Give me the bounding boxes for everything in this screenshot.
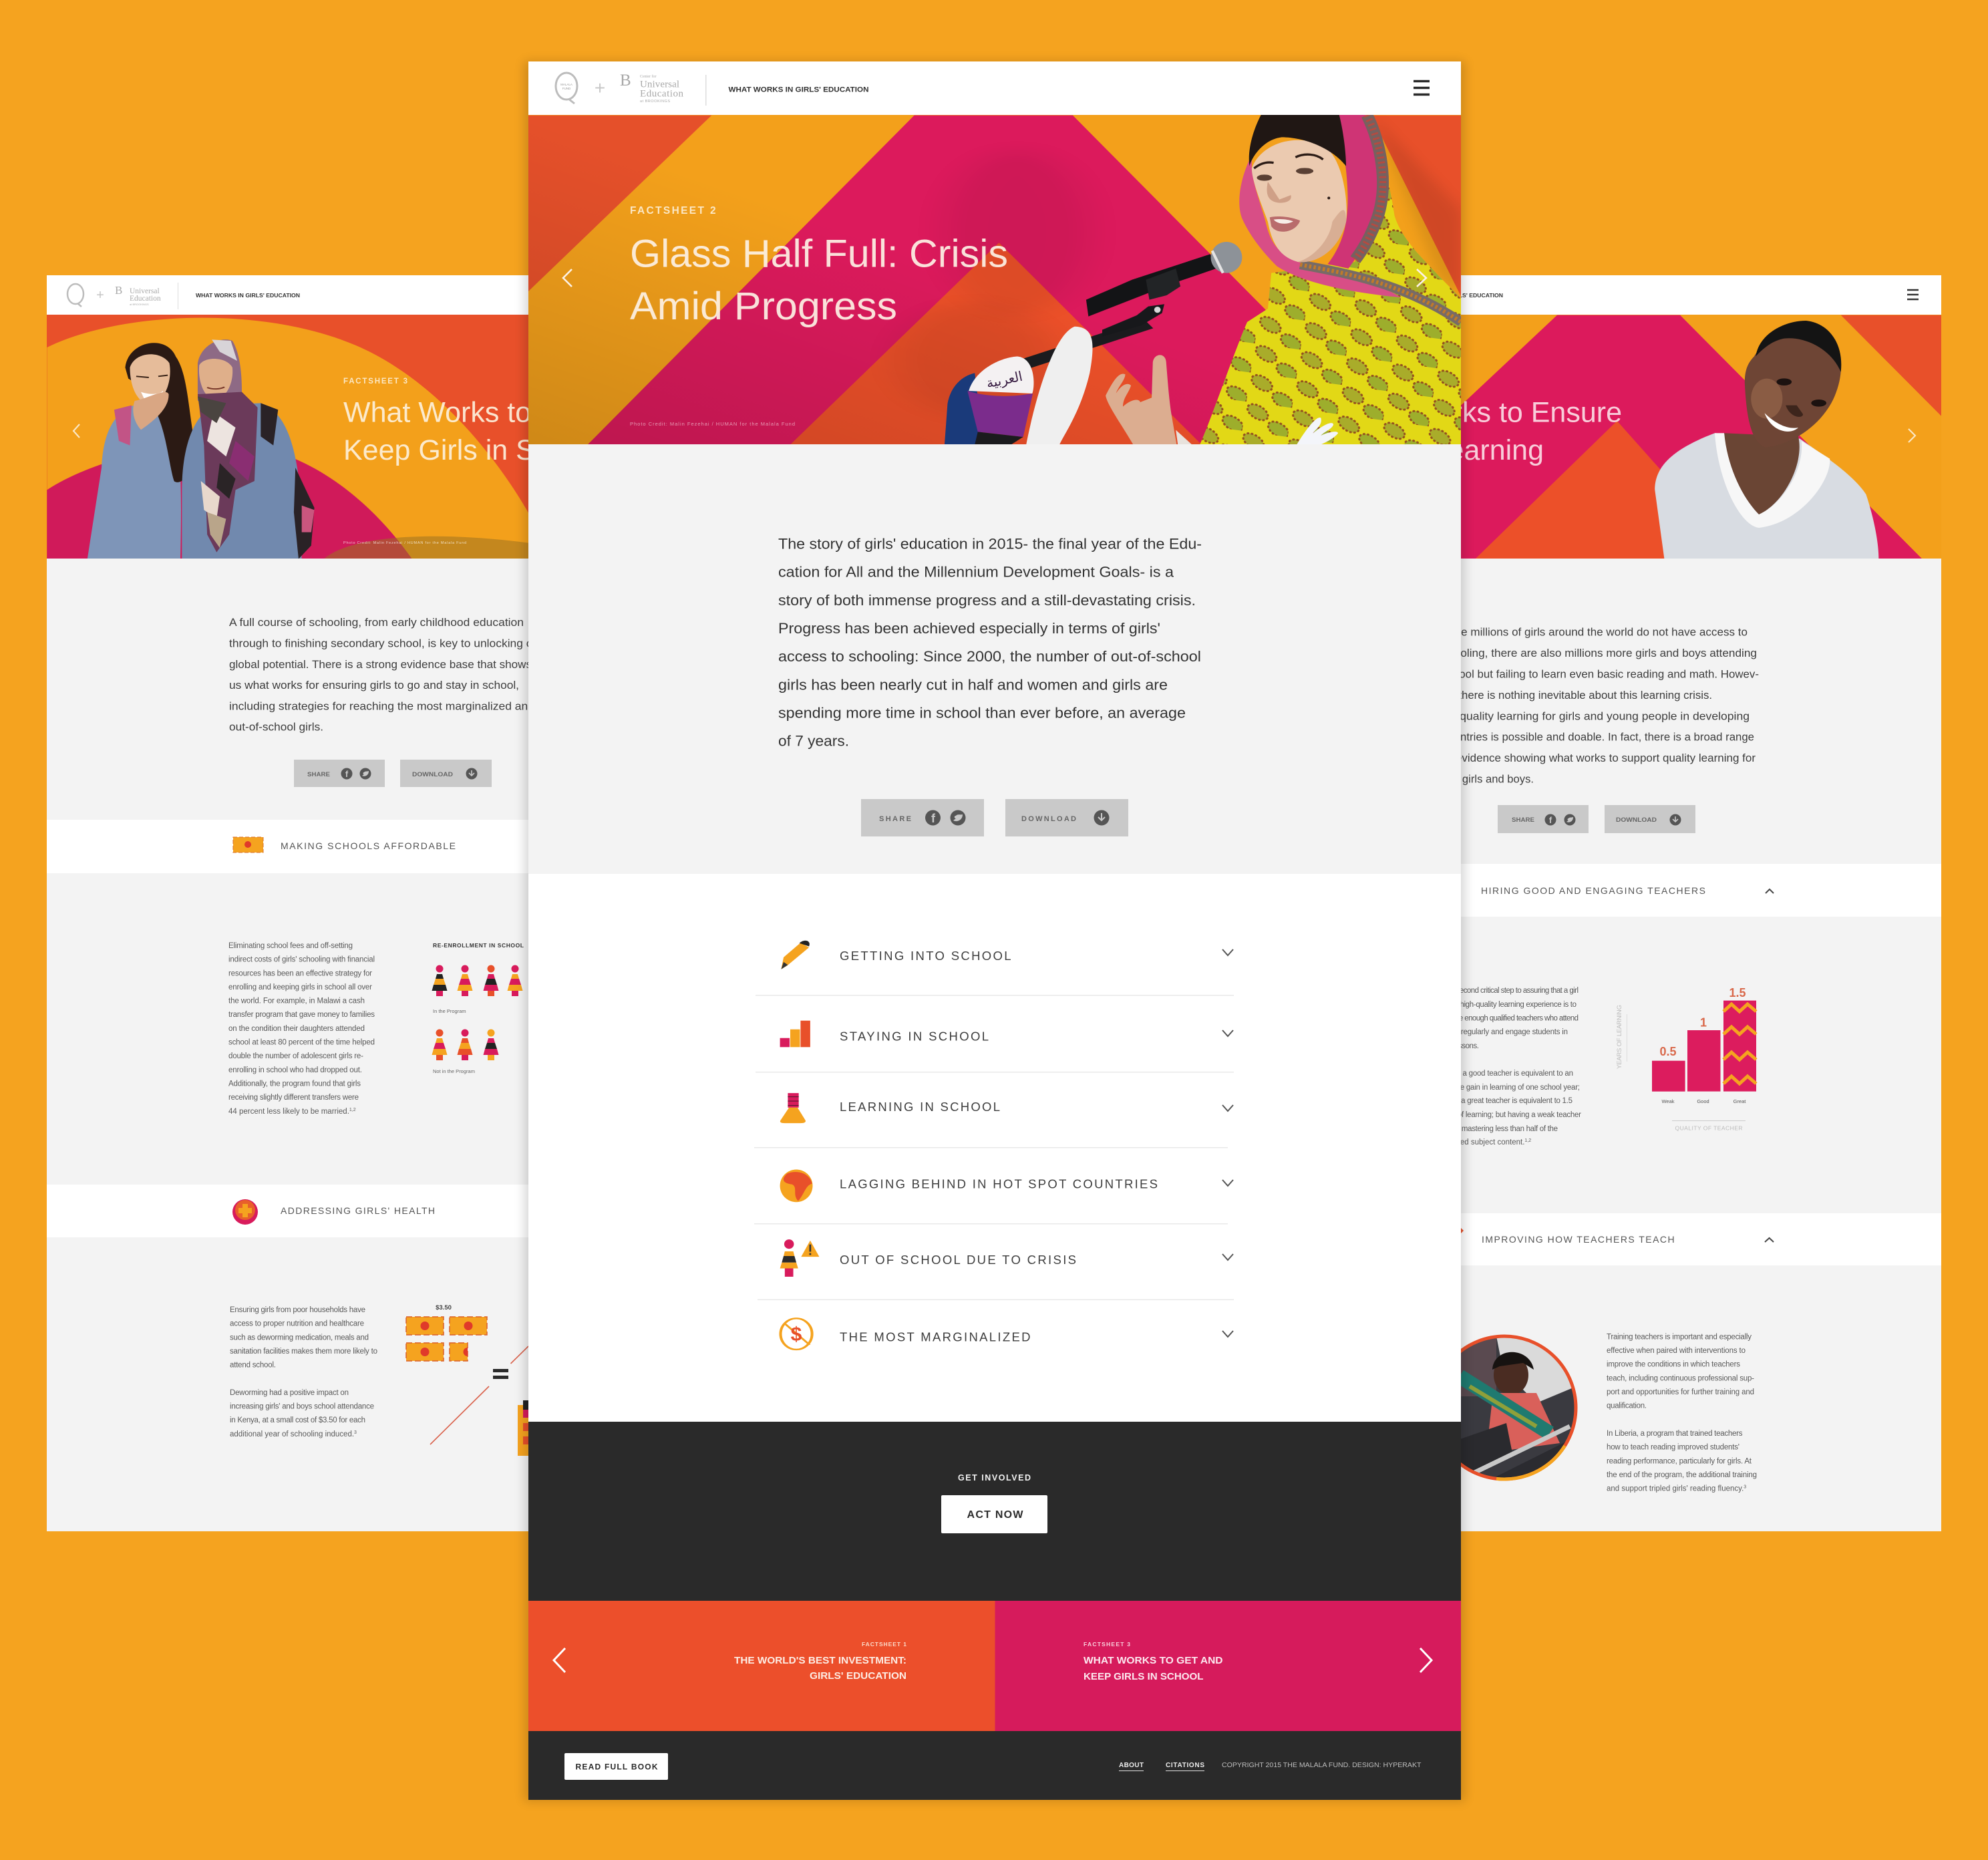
speaker illustration <box>1086 115 1462 447</box>
item: learning in school: LEARNING IN SCHOOL <box>840 1100 1000 1114</box>
section bar: making schools affordable: MAKING SCHOOLS AFFORDABLE <box>281 840 456 851</box>
item: learning in school <box>754 1100 1233 1148</box>
icons drawn in list space <box>780 941 819 1350</box>
text: eliminating school fees: receiving slightly different transfers were <box>228 1094 359 1102</box>
left intro text: A full course of schooling, from early childhood education <box>229 616 524 629</box>
copyright: COPYRIGHT 2015 THE MALALA FUND. DESIGN: HYPERAKT <box>1222 1762 1422 1769</box>
left hero title: What Works to Get and <box>343 397 641 429</box>
text: eliminating school fees: Eliminating school fees and off-setting <box>228 942 353 950</box>
right share button: f <box>1549 815 1552 825</box>
photo: teachers in classroom circle <box>1430 1333 1580 1490</box>
text: teachers matter: means mastering less than half of the <box>1438 1125 1558 1133</box>
right hero title: Quality Learning <box>1335 434 1544 466</box>
logo: Malala Fund: MALALA <box>560 83 572 86</box>
bar chart: years of learning by quality of teacher: YEARS OF LEARNING <box>1616 1005 1623 1069</box>
text: training teachers: Training teachers is important and especially <box>1607 1333 1752 1341</box>
icon: rising bars <box>780 1021 810 1047</box>
right girl <box>182 339 315 559</box>
logo: Center for Universal Education at Brookings: B <box>620 71 631 90</box>
bar chart: years of learning by quality of teacher: 1.5 <box>1729 986 1746 999</box>
left header bar: at BROOKINGS <box>130 303 149 306</box>
pictogram: re-enrollment in school: In the Program <box>433 1008 466 1014</box>
text: ensuring girls health: sanitation facilities makes them more likely to <box>230 1348 377 1356</box>
right hero title <box>1335 397 1622 466</box>
section bar: improving how teachers teach: IMPROVING HOW TEACHERS TEACH <box>1482 1234 1675 1245</box>
text: teachers matter <box>1438 987 1581 1146</box>
pictogram: re-enrollment in school: Not in the Program <box>433 1068 475 1074</box>
text: eliminating school fees: indirect costs of girls' schooling with financial <box>228 956 375 964</box>
icon: menu <box>1414 82 1430 95</box>
text: training teachers: improve the conditions in which teachers <box>1607 1361 1740 1369</box>
left hero title: Keep Girls in School <box>343 434 604 466</box>
intro text: girls has been nearly cut in half and women and girls are <box>778 676 1168 693</box>
right hero arrow <box>1909 429 1915 442</box>
section bar: improving how teachers teach <box>1461 1213 1941 1265</box>
logo: Center for Universal Education at Brookings: at BROOKINGS <box>640 100 670 104</box>
left header bar <box>47 275 528 315</box>
intro text: spending more time in school than ever before, an average <box>778 704 1186 721</box>
left download button <box>400 760 492 787</box>
text: training teachers: and support tripled girls' reading fluency. <box>1607 1485 1744 1493</box>
left hero arrow <box>73 424 79 438</box>
hero arrow right <box>1417 269 1426 287</box>
text: eliminating school fees: school at least 80 percent of the time helped <box>228 1039 375 1047</box>
logo: Malala Fund <box>556 73 577 104</box>
text: eliminating school fees <box>228 942 375 1116</box>
text: training teachers: port and opportunities for further training and <box>1607 1388 1754 1396</box>
hero title: Glass Half Full: Crisis <box>630 232 1008 275</box>
right intro text: school but failing to learn even basic reading and math. Howev- <box>1442 668 1759 680</box>
text: ensuring girls health: access to proper nutrition and healthcare <box>230 1320 364 1328</box>
left header bar: Education <box>130 295 161 303</box>
right hero with smiling young woman <box>1335 315 1942 559</box>
section bar: making schools affordable <box>47 820 528 873</box>
button: act now: ACT NOW <box>967 1509 1023 1521</box>
left intro text: through to finishing secondary school, is key to unlocking our <box>229 637 543 649</box>
next factsheet link <box>995 1601 1461 1731</box>
panel: factsheet 3 left page <box>47 275 528 1531</box>
left intro text: out-of-school girls. <box>229 721 323 734</box>
next factsheet link: WHAT WORKS TO GET AND <box>1084 1655 1223 1666</box>
icon: banknote <box>233 837 263 852</box>
text: training teachers: 3 <box>1744 1485 1746 1490</box>
share button: SHARE <box>879 815 911 823</box>
logo: Center for Universal Education at Brookings: Education <box>640 88 684 99</box>
item: lagging behind in hot spot countries <box>754 1177 1233 1224</box>
intro text: story of both immense progress and a still-devastating crisis. <box>778 592 1196 609</box>
microphone label: العربية <box>985 368 1024 392</box>
panel shadow <box>524 61 1465 1801</box>
right intro text <box>1436 626 1759 786</box>
text: teachers matter: has a high-quality learning experience is to <box>1440 1001 1577 1009</box>
microphones <box>945 319 1153 445</box>
main hero with speaker at microphones <box>521 115 1465 447</box>
icon: health cross <box>232 1199 258 1225</box>
icon: facebook <box>925 810 941 826</box>
panel: factsheet 4 right page <box>1335 275 1942 1531</box>
item: out of school due to crisis: OUT OF SCHOOL DUE TO CRISIS <box>840 1253 1076 1267</box>
item: getting into school <box>756 949 1234 995</box>
download button: DOWNLOAD <box>1021 815 1076 823</box>
previous factsheet link: GIRLS' EDUCATION <box>810 1670 906 1682</box>
left intro text: global potential. There is a strong evidence base that shows <box>229 658 532 671</box>
item: staying in school: STAYING IN SCHOOL <box>840 1029 989 1044</box>
intro text: cation for All and the Millennium Development Goals- is a <box>778 564 1174 581</box>
hero photo credit: Photo Credit: Malin Fezehai / HUMAN for the Malala Fund <box>630 421 795 427</box>
left hero credit: Photo Credit: Malin Fezehai / HUMAN for the Malala Fund <box>343 541 466 545</box>
text: ensuring girls health: additional year of schooling induced. <box>230 1430 354 1438</box>
left header bar: + <box>96 288 104 303</box>
previous factsheet link: FACTSHEET 1 <box>862 1641 906 1648</box>
left share button: SHARE <box>307 771 330 778</box>
text: ensuring girls health: increasing girls' and boys school attendance <box>230 1403 374 1411</box>
button: act now <box>941 1495 1047 1533</box>
panel: factsheet 2 main page <box>521 61 1465 1800</box>
item: out of school due to crisis <box>758 1253 1234 1300</box>
text: eliminating school fees: double the number of adolescent girls re- <box>228 1052 363 1060</box>
section bar: hiring good and engaging teachers: HIRING GOOD AND ENGAGING TEACHERS <box>1481 885 1705 896</box>
icon: girl and warning sign <box>780 1239 819 1277</box>
text: eliminating school fees: enrolling in school who had dropped out. <box>228 1066 362 1074</box>
button: read full book <box>564 1753 668 1780</box>
section bar: hiring good and engaging teachers <box>1461 864 1941 917</box>
text: teachers matter: The second critical step to assuring that a girl <box>1442 987 1579 995</box>
right intro text: both girls and boys. <box>1438 772 1534 786</box>
accordion list <box>528 874 1461 1422</box>
hero arrow left <box>563 269 572 287</box>
next factsheet link: FACTSHEET 3 <box>1084 1641 1130 1648</box>
next factsheet link: KEEP GIRLS IN SCHOOL <box>1084 1671 1204 1682</box>
left header bar: WHAT WORKS IN GIRLS' EDUCATION <box>196 293 300 299</box>
text: teachers matter: Having a good teacher is equivalent to an <box>1438 1070 1573 1078</box>
text: ensuring girls health: attend school. <box>230 1362 276 1370</box>
item: the most marginalized <box>840 1330 1233 1344</box>
footer <box>528 1731 1461 1800</box>
text: ensuring girls health: 3 <box>354 1430 357 1435</box>
icon: facebook: f <box>931 812 936 825</box>
bar chart: years of learning by quality of teacher: QUALITY OF TEACHER <box>1675 1125 1742 1132</box>
left intro text: including strategies for reaching the most marginalized and <box>229 700 534 712</box>
button: read full book: READ FULL BOOK <box>576 1762 658 1771</box>
hero eyebrow: FACTSHEET 2 <box>630 205 716 216</box>
left hero eyebrow: FACTSHEET 3 <box>343 377 407 385</box>
pictogram: re-enrollment in school: RE-ENROLLMENT IN SCHOOL <box>433 942 524 949</box>
bar chart: years of learning by quality of teacher: Great <box>1733 1098 1746 1104</box>
section bar: addressing girls' health <box>47 1185 528 1237</box>
footer link: about: ABOUT <box>1119 1762 1144 1769</box>
text: training teachers: reading performance, particularly for girls. At <box>1607 1457 1752 1465</box>
text: teachers matter: 1,2 <box>1524 1138 1531 1143</box>
text: teachers matter: having a great teacher is equivalent to 1.5 <box>1438 1097 1572 1105</box>
hero title <box>630 232 1008 328</box>
right hero title: What Works to Ensure <box>1335 397 1622 429</box>
right intro text: of evidence showing what works to support quality learning for <box>1443 752 1756 764</box>
text: teachers matter: expected subject content. <box>1438 1138 1524 1146</box>
intro text: access to schooling: Since 2000, the number of out-of-school <box>778 648 1201 665</box>
icon: flask <box>780 1093 806 1123</box>
left share button: f <box>345 769 349 779</box>
icon: download <box>1094 810 1109 826</box>
text: training teachers: teach, including continuous professional sup- <box>1607 1374 1754 1382</box>
right header bar <box>1399 275 1941 315</box>
logo: Center for Universal Education at Brookings: Universal <box>640 79 679 90</box>
text: teachers matter: ensure enough qualified teachers who attend <box>1442 1014 1579 1022</box>
item: getting into school: GETTING INTO SCHOOL <box>840 949 1011 963</box>
right share button: SHARE <box>1512 816 1534 823</box>
bar chart: years of learning by quality of teacher: Good <box>1697 1098 1709 1104</box>
logo: Center for Universal Education at Brookings: Center for <box>640 74 656 79</box>
bar chart: years of learning by quality of teacher: 0.5 <box>1659 1045 1677 1058</box>
text: ensuring girls health: in Kenya, at a small cost of $3.50 for each <box>230 1416 365 1424</box>
left hero title <box>343 401 528 466</box>
section bar: addressing girls' health: ADDRESSING GIRLS' HEALTH <box>281 1205 435 1216</box>
bar chart: years of learning by quality of teacher <box>1616 986 1756 1132</box>
text: eliminating school fees: enrolling and keeping girls in school all over <box>228 983 372 991</box>
text: ensuring girls health <box>230 1306 377 1438</box>
left download button: DOWNLOAD <box>412 771 454 778</box>
text: training teachers: In Liberia, a program that trained teachers <box>1607 1430 1743 1438</box>
dollar sign: $ <box>791 1324 802 1346</box>
get involved section <box>528 1422 1461 1601</box>
logo: Malala Fund: FUND <box>562 87 571 90</box>
right intro text: er, there is nothing inevitable about this learning crisis. <box>1443 689 1712 702</box>
share button <box>861 799 984 836</box>
right intro text: But quality learning for girls and young people in developing <box>1439 710 1750 722</box>
hero title: Amid Progress <box>630 285 897 328</box>
item: staying in school <box>756 1029 1234 1073</box>
item: the most marginalized: THE MOST MARGINALIZED <box>840 1330 1030 1344</box>
text: training teachers: effective when paired with interventions to <box>1607 1347 1746 1355</box>
chart: cost of deworming in banknotes <box>406 1304 528 1456</box>
text: eliminating school fees: resources has been an effective strategy for <box>228 969 372 977</box>
text: teachers matter: years of learning; but having a weak teacher <box>1438 1111 1581 1119</box>
text: teachers matter: average gain in learning of one school year; <box>1438 1084 1580 1092</box>
text: eliminating school fees: transfer program that gave money to families <box>228 1011 375 1019</box>
main header bar: WHAT WORKS IN GIRLS' EDUCATION <box>728 86 869 94</box>
text: eliminating school fees: Additionally, the program found that girls <box>228 1080 361 1088</box>
main header bar: + <box>595 78 605 98</box>
text: eliminating school fees: 1,2 <box>349 1108 356 1112</box>
icon: twitter <box>950 810 966 826</box>
right intro text: schooling, there are also millions more girls and boys attending <box>1436 647 1757 659</box>
text: ensuring girls health: Deworming had a positive impact on <box>230 1389 349 1397</box>
text: teachers matter: their lessons. <box>1438 1042 1479 1050</box>
icon: menu <box>1907 290 1919 299</box>
main header bar <box>528 61 1461 115</box>
right share button <box>1498 805 1589 833</box>
right header bar: WHAT WORKS IN GIRLS' EDUCATION <box>1399 293 1503 299</box>
left intro text: us what works for ensuring girls to go and stay in school, <box>229 679 519 691</box>
footer link: citations: CITATIONS <box>1166 1762 1204 1769</box>
left intro text <box>229 616 543 734</box>
intro text: Progress has been achieved especially in terms of girls' <box>778 620 1160 637</box>
intro text <box>778 536 1202 750</box>
right download button <box>1605 805 1695 833</box>
right download button: DOWNLOAD <box>1616 816 1657 823</box>
intro section <box>528 444 1461 874</box>
text: training teachers: the end of the program, the additional training <box>1607 1471 1757 1479</box>
previous factsheet link <box>528 1601 995 1731</box>
left header bar: Universal <box>130 287 160 295</box>
left girl <box>88 343 196 559</box>
text: training teachers <box>1607 1333 1757 1493</box>
download button <box>1005 799 1128 836</box>
text: training teachers: qualification. <box>1607 1402 1647 1410</box>
pictogram: re-enrollment in school <box>432 942 524 1074</box>
icon: no money <box>781 1318 812 1350</box>
logo: Center for Universal Education at Brookings <box>620 71 684 104</box>
intro text: of 7 years. <box>778 732 849 750</box>
text: eliminating school fees: on the condition their daughters attended <box>228 1025 365 1033</box>
bar chart: years of learning by quality of teacher: 1 <box>1700 1016 1707 1030</box>
icon: pencil <box>781 941 810 969</box>
text: ensuring girls health: Ensuring girls from poor households have <box>230 1306 365 1314</box>
bar chart: years of learning by quality of teacher: Weak <box>1661 1098 1675 1104</box>
text: teachers matter: school regularly and engage students in <box>1438 1028 1568 1036</box>
previous factsheet link: THE WORLD'S BEST INVESTMENT: <box>734 1655 906 1666</box>
text: eliminating school fees: 44 percent less likely to be married. <box>228 1108 349 1116</box>
right intro text: While millions of girls around the world do not have access to <box>1439 626 1748 639</box>
text: training teachers: how to teach reading improved students' <box>1607 1444 1740 1452</box>
icon: globe <box>780 1169 812 1202</box>
item: lagging behind in hot spot countries: LAGGING BEHIND IN HOT SPOT COUNTRIES <box>840 1177 1158 1191</box>
left header bar: B <box>115 284 122 297</box>
chart: cost of deworming in banknotes: $3.50 <box>436 1304 452 1311</box>
get involved section: GET INVOLVED <box>958 1473 1031 1483</box>
left hero with two girls <box>47 315 528 559</box>
intro text: The story of girls' education in 2015- the final year of the Edu- <box>778 536 1202 552</box>
right intro text: countries is possible and doable. In fact, there is a broad range <box>1442 731 1754 744</box>
left share button <box>294 760 385 787</box>
text: ensuring girls health: such as deworming medication, meals and <box>230 1334 369 1342</box>
text: eliminating school fees: the world. For example, in Malawi a cash <box>228 997 365 1005</box>
